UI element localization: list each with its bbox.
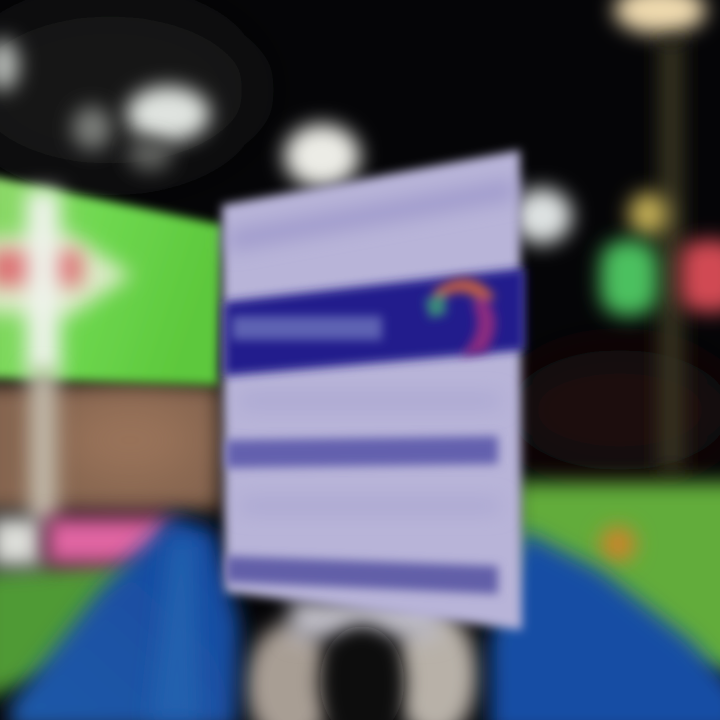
light pole (660, 40, 682, 470)
hand holding the card (246, 600, 477, 720)
blue sleeve right (490, 530, 720, 720)
header title block (232, 316, 382, 340)
header logo (425, 278, 496, 356)
floodlights (0, 0, 706, 244)
blue header band (224, 268, 525, 376)
right scoreboard lights (600, 192, 720, 316)
footer bar (226, 556, 498, 594)
panel: card (222, 150, 525, 630)
white post (30, 370, 56, 520)
body text rows (240, 395, 500, 512)
stand: brown crowd band (0, 385, 220, 510)
field left (0, 560, 150, 700)
card top stripe (228, 180, 515, 250)
pink banner (0, 517, 171, 567)
field right (515, 482, 720, 672)
section bar (226, 436, 498, 468)
left green screen (0, 176, 222, 385)
blue sleeve left (10, 516, 240, 720)
screen logo (0, 234, 132, 316)
